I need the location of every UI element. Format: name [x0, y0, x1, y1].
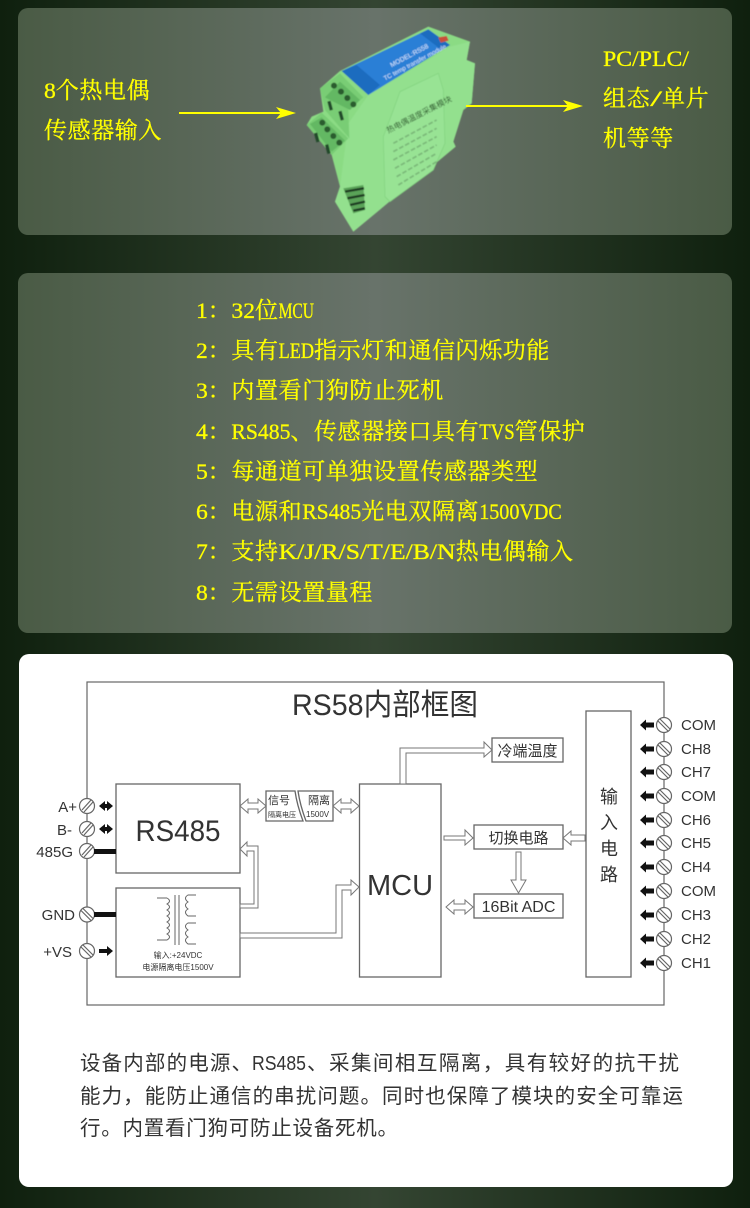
left terminals: +VS: [43, 944, 72, 961]
text: input sensors: [44, 72, 162, 145]
block: signal isolation: 信号: [268, 794, 290, 807]
right terminals: CH6: [681, 812, 711, 829]
text: description: 行。内置看门狗可防止设备死机。: [80, 1117, 398, 1140]
text: description: [80, 1052, 683, 1140]
text: output targets: 机等等: [603, 120, 674, 153]
block: signal isolation: 隔离电压: [268, 810, 296, 819]
text: feature list: 5：每通道可单独设置传感器类型: [196, 453, 538, 486]
left terminals: GND: [42, 907, 75, 924]
icon: transmitter module: MODEL:RS58: [389, 43, 430, 69]
block: cold junction: 冷端温度: [497, 743, 558, 760]
right terminals: CH4: [681, 859, 711, 876]
panel: product overview: [18, 8, 732, 235]
block: signal isolation: 隔离: [308, 793, 330, 807]
icon: transmitter module: 热电偶温度采集模块: [385, 94, 454, 136]
left terminals: 485G: [36, 844, 73, 861]
block: cold junction: [492, 738, 563, 762]
right terminals: COM: [681, 883, 716, 900]
text: description: 、采集间相互隔离，具有较好的抗干扰: [307, 1052, 679, 1075]
text: output targets: 组态/单片: [603, 80, 709, 113]
block: MCU: [360, 784, 441, 977]
block: isolated power: [116, 888, 240, 977]
right terminals: CH5: [681, 835, 711, 852]
arrow: input: [179, 107, 296, 119]
right terminals: CH8: [681, 741, 711, 758]
text: feature list: 7：支持K/J/R/S/T/E/B/N 热电偶输入: [196, 533, 574, 566]
right terminals: CH1: [681, 955, 711, 972]
block: ADC: 16Bit ADC: [482, 899, 555, 916]
text: feature list: 4：RS485、传感器接口具有TVS管保护: [196, 413, 585, 446]
text: description: RS485: [252, 1052, 306, 1075]
panel: feature list: [18, 273, 732, 633]
block: isolated power: 输入:+24VDC: [154, 950, 203, 960]
block: switching circuit: [474, 825, 563, 849]
text: output targets: [603, 46, 709, 153]
block: input circuit: [586, 711, 631, 977]
arrow: output: [466, 100, 583, 112]
icon: transmitter module: TC temp transfer module: [383, 43, 448, 82]
text: feature list: 2：具有LED指示灯和通信闪烁功能: [196, 332, 550, 365]
text: output targets: PC/PLC/: [603, 46, 690, 71]
block: input circuit: 输: [600, 787, 618, 807]
left terminals: B-: [57, 822, 72, 839]
text: feature list: 8：无需设置量程: [196, 574, 373, 607]
block: signal isolation: 1500V: [306, 810, 330, 819]
left terminals: [36, 798, 116, 961]
block: isolated power: 电源隔离电压1500V: [142, 962, 214, 972]
block: input circuit: 电: [600, 839, 618, 859]
text: feature list: [196, 292, 585, 607]
text: input sensors: 传感器输入: [44, 112, 162, 145]
text: feature list: 1：32位MCU: [196, 292, 314, 325]
block: ADC: [474, 894, 563, 918]
block: RS485: RS485: [136, 815, 220, 848]
right terminals: CH3: [681, 907, 711, 924]
text: description: 能力，能防止通信的串扰问题。同时也保障了模块的安全可靠运: [80, 1085, 683, 1108]
diagram: title: RS58内部框图: [292, 689, 478, 722]
text: input sensors: 8个热电偶: [44, 72, 150, 105]
block: signal isolation: [266, 791, 333, 821]
block: switching circuit: 切换电路: [488, 830, 549, 847]
text: feature list: 6：电源和RS485光电双隔离1500VDC: [196, 493, 562, 526]
diagram: outer frame: [87, 682, 664, 1005]
block: MCU: MCU: [367, 870, 433, 902]
block: input circuit: 入: [600, 813, 618, 833]
block: input circuit: 路: [600, 865, 618, 885]
right terminals: [640, 717, 716, 972]
block: RS485: [116, 784, 240, 873]
text: description: 设备内部的电源、: [80, 1052, 252, 1075]
panel: block diagram: [19, 654, 733, 1187]
right terminals: COM: [681, 717, 716, 734]
arrows: internal connections: [240, 742, 585, 938]
right terminals: CH7: [681, 764, 711, 781]
icon: transmitter module: [307, 27, 475, 232]
left terminals: A+: [58, 799, 77, 816]
right terminals: CH2: [681, 931, 711, 948]
text: feature list: 3：内置看门狗防止死机: [196, 372, 444, 405]
right terminals: COM: [681, 788, 716, 805]
